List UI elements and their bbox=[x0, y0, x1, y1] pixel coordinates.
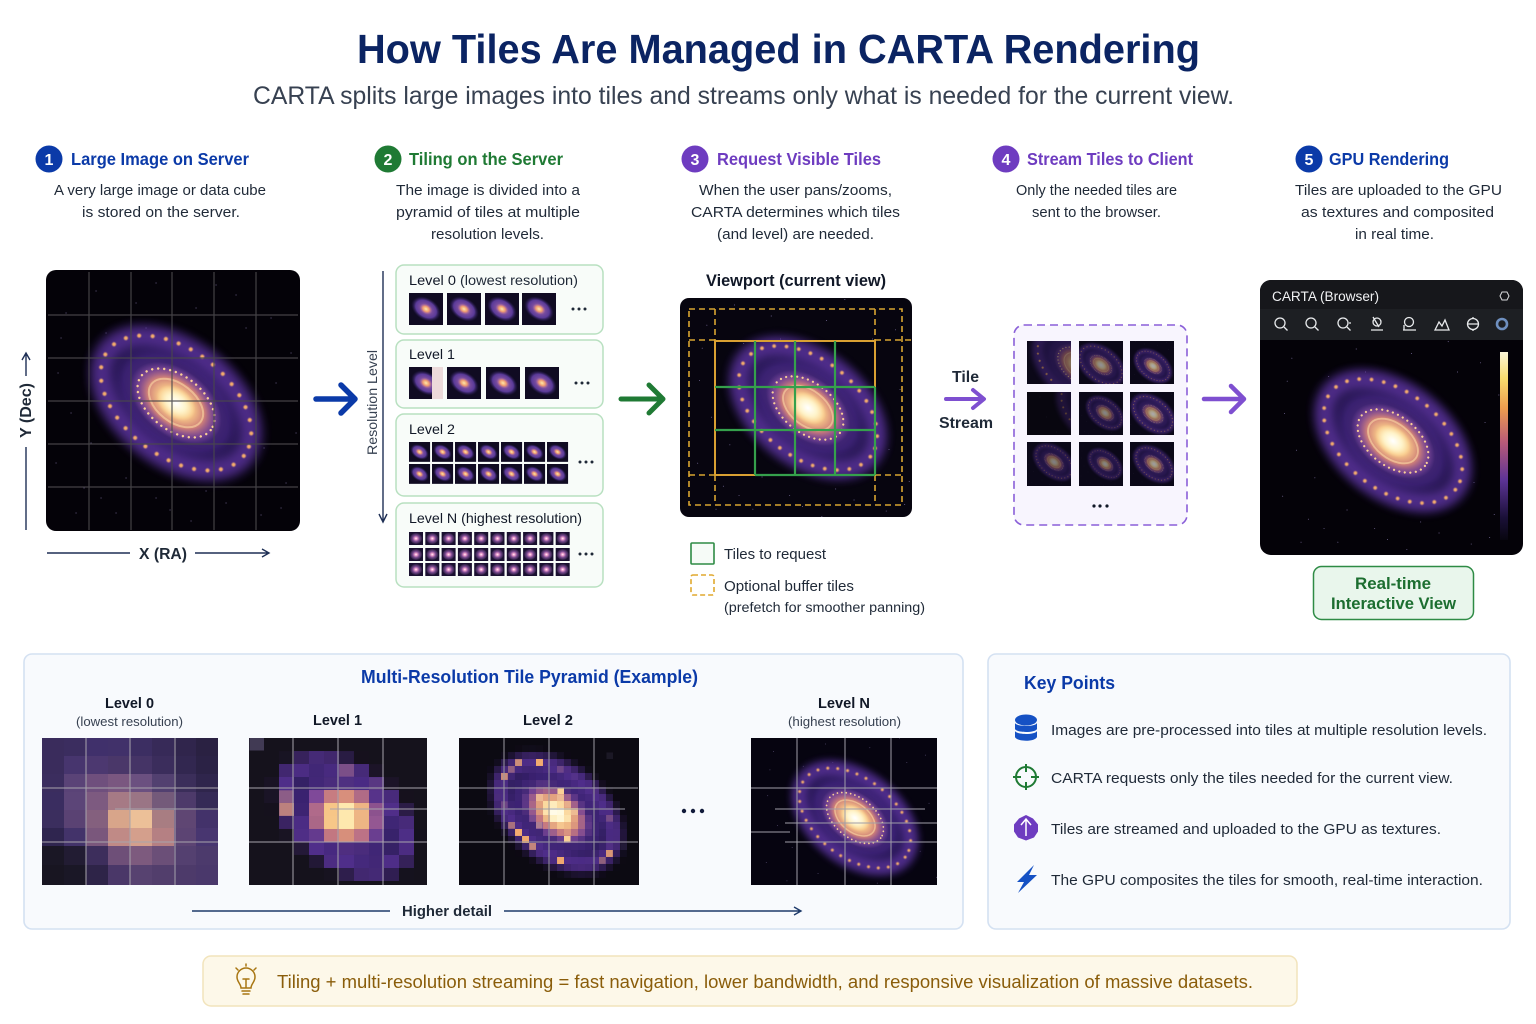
legend: tiles to request bbox=[691, 543, 826, 564]
step 5 description: as textures and composited bbox=[1301, 204, 1494, 221]
step 5 header: 5 bbox=[1305, 152, 1314, 169]
step 1 description: A very large image or data cube bbox=[54, 182, 266, 199]
step 4 header: Stream Tiles to Client bbox=[1027, 149, 1193, 169]
step 3 description: (and level) are needed. bbox=[717, 226, 874, 243]
icon: lightning bolt bbox=[1017, 865, 1037, 893]
icon: database bbox=[1015, 714, 1037, 741]
arrow: step 1 to 2 bbox=[316, 385, 355, 413]
panel: CARTA browser bbox=[1260, 280, 1523, 555]
takeaway text: Tiling + multi-resolution streaming = fast navigation, lower bandwidth, and responsive visualization of massive datasets. bbox=[277, 972, 1253, 992]
icon: crosshair bbox=[1013, 764, 1039, 790]
step 1 header bbox=[36, 146, 249, 172]
subtitle: CARTA splits large images into tiles and streams only what is needed for the current view. bbox=[253, 82, 1234, 110]
panel: level N tiles: Level N (highest resolution) bbox=[409, 510, 582, 526]
icon: light bulb bbox=[236, 964, 256, 994]
resolution axis: Resolution Level bbox=[364, 350, 380, 455]
step 2 header bbox=[374, 146, 563, 172]
step 4 header: 4 bbox=[1002, 152, 1011, 169]
panel: level N tiles bbox=[396, 503, 603, 587]
step 2 header: 2 bbox=[384, 152, 393, 169]
step 4 header bbox=[992, 146, 1193, 172]
step 5 header bbox=[1296, 146, 1449, 172]
viewport heading: Viewport (current view) bbox=[706, 272, 886, 290]
pyramid heading: Multi-Resolution Tile Pyramid (Example) bbox=[361, 667, 698, 687]
step 2 description: resolution levels. bbox=[431, 226, 544, 243]
key point 2: CARTA requests only the tiles needed for the current view. bbox=[1051, 770, 1453, 787]
step 2 description bbox=[396, 182, 581, 243]
level 1 label: Level 1 bbox=[313, 713, 362, 729]
step 5 description: in real time. bbox=[1355, 226, 1434, 243]
X axis label bbox=[47, 546, 269, 563]
resolution axis bbox=[364, 271, 387, 522]
real-time badge bbox=[1314, 566, 1474, 620]
level N image bbox=[751, 728, 950, 908]
Y axis label bbox=[18, 353, 35, 530]
viewport image with tile overlay bbox=[680, 296, 926, 520]
step 3 description: When the user pans/zooms, bbox=[699, 182, 892, 199]
panel: key points bbox=[988, 654, 1510, 929]
step 3 header: Request Visible Tiles bbox=[717, 149, 881, 169]
key point 4: The GPU composites the tiles for smooth, real-time interaction. bbox=[1051, 872, 1483, 889]
step 2 description: pyramid of tiles at multiple bbox=[396, 204, 580, 221]
step 5 description: Tiles are uploaded to the GPU bbox=[1295, 182, 1502, 199]
tile: row 2 bbox=[1027, 351, 1186, 473]
level 0 image bbox=[42, 738, 218, 885]
key points heading: Key Points bbox=[1024, 673, 1115, 693]
large image on server bbox=[46, 270, 304, 531]
panel: level 0 tiles: Level 0 (lowest resolution) bbox=[409, 272, 578, 288]
arrow: tile stream bbox=[946, 390, 984, 408]
step 5 header: GPU Rendering bbox=[1329, 149, 1449, 169]
level 2 image bbox=[459, 721, 654, 905]
step 1 header: Large Image on Server bbox=[71, 149, 249, 169]
step 5 description bbox=[1295, 182, 1502, 243]
step 4 description bbox=[1016, 182, 1177, 221]
key point 3: Tiles are streamed and uploaded to the GPU as textures. bbox=[1051, 821, 1441, 838]
legend: tiles to request: Tiles to request bbox=[724, 547, 826, 563]
panel: level 0 tiles bbox=[396, 265, 603, 334]
level N label bbox=[788, 696, 901, 729]
real-time badge: Interactive View bbox=[1331, 594, 1457, 613]
real-time badge: Real-time bbox=[1355, 574, 1431, 593]
step 2 header: Tiling on the Server bbox=[409, 149, 563, 169]
higher detail arrow bbox=[192, 903, 801, 920]
colour bar bbox=[1500, 352, 1508, 540]
level 2 label: Level 2 bbox=[523, 713, 573, 729]
title: How Tiles Are Managed in CARTA Rendering bbox=[357, 26, 1200, 72]
panel: level 2 tiles: Level 2 bbox=[409, 421, 455, 437]
panel: level 2 tiles bbox=[396, 414, 603, 496]
panel: multi-resolution tile pyramid bbox=[24, 654, 963, 929]
arrow: step 2 to 3 bbox=[621, 385, 663, 413]
legend: optional buffer tiles bbox=[691, 575, 925, 615]
step 1 header: 1 bbox=[45, 152, 54, 169]
level 1 image bbox=[242, 719, 448, 913]
higher detail arrow: Higher detail bbox=[402, 903, 492, 920]
arrow: step 4 to 5 bbox=[1204, 386, 1244, 412]
step 4 description: sent to the browser. bbox=[1032, 204, 1161, 221]
takeaway banner bbox=[203, 956, 1297, 1006]
step 3 description bbox=[691, 182, 900, 243]
tile stream label: Tile bbox=[952, 369, 979, 386]
legend: optional buffer tiles: (prefetch for smoother panning) bbox=[724, 599, 925, 615]
step 3 header: 3 bbox=[691, 152, 700, 169]
step 2 description: The image is divided into a bbox=[396, 182, 581, 199]
toolbar icons bbox=[1275, 317, 1507, 331]
step 1 description bbox=[54, 182, 266, 221]
step 3 description: CARTA determines which tiles bbox=[691, 204, 900, 221]
panel: level 1 tiles bbox=[396, 340, 603, 408]
panel: level 1 tiles: Level 1 bbox=[409, 346, 455, 362]
Y axis label: Y (Dec) bbox=[18, 383, 35, 438]
icon: upload bbox=[1014, 815, 1038, 840]
level 0 label bbox=[76, 696, 183, 729]
X axis label: X (RA) bbox=[139, 546, 187, 563]
legend: optional buffer tiles: Optional buffer tiles bbox=[724, 579, 854, 595]
panel: CARTA browser: CARTA (Browser) bbox=[1272, 289, 1379, 304]
tile stream label: Stream bbox=[939, 415, 993, 432]
key point 1: Images are pre-processed into tiles at multiple resolution levels. bbox=[1051, 722, 1487, 739]
level 0 label: (lowest resolution) bbox=[76, 714, 183, 729]
panel: streamed tiles bbox=[1008, 299, 1187, 525]
icon: window control bbox=[1500, 292, 1509, 300]
level N label: (highest resolution) bbox=[788, 714, 901, 729]
step 1 description: is stored on the server. bbox=[82, 204, 240, 221]
level N label: Level N bbox=[818, 696, 870, 712]
step 3 header bbox=[682, 146, 881, 172]
ellipsis between levels bbox=[682, 809, 704, 813]
level 0 label: Level 0 bbox=[105, 696, 154, 712]
tile: row 1 bbox=[1008, 299, 1181, 433]
tile: row 3 bbox=[1023, 433, 1185, 493]
step 4 description: Only the needed tiles are bbox=[1016, 182, 1177, 199]
tile stream label bbox=[939, 369, 993, 432]
